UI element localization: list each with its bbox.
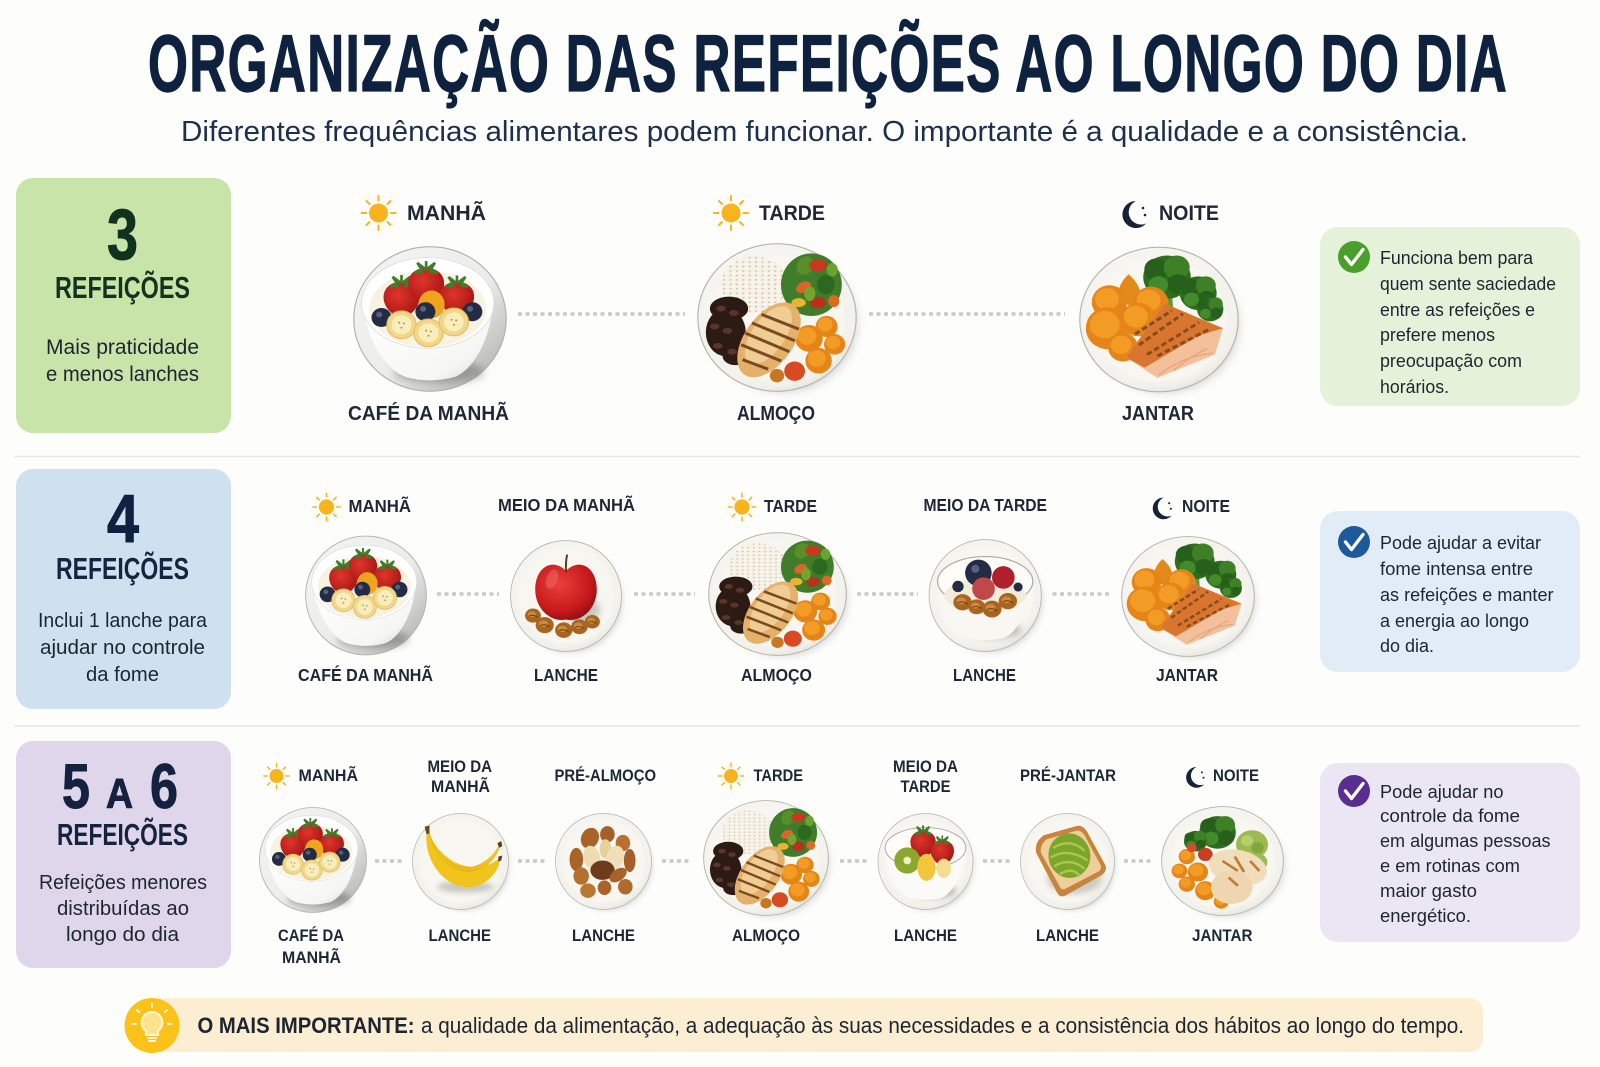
connector xyxy=(375,859,404,863)
time label: manhã: MANHÃ xyxy=(407,202,486,225)
note: blue xyxy=(1320,511,1580,672)
time label: meio da manhã: MEIO DA xyxy=(428,758,492,776)
time label: noite xyxy=(1153,496,1230,519)
panel: 5 a 6 refeições: 5 xyxy=(62,752,90,822)
food: iogurte com frutas xyxy=(878,813,974,910)
note: blue: Pode ajudar a evitar xyxy=(1380,532,1541,553)
time label: manhã: MANHÃ xyxy=(298,765,358,785)
label: café da manhã xyxy=(278,926,344,967)
time label: noite: NOITE xyxy=(1159,202,1219,225)
label: café da manhã: CAFÉ DA xyxy=(278,926,344,945)
note: purple: energético. xyxy=(1380,905,1471,926)
panel: 5 a 6 refeições: longo do dia xyxy=(66,923,180,946)
food: jantar xyxy=(1080,247,1239,392)
time label: noite: NOITE xyxy=(1182,496,1230,516)
food: maçã com castanhas xyxy=(511,541,622,652)
label: café da manhã: MANHÃ xyxy=(282,947,341,967)
time label: noite: NOITE xyxy=(1213,767,1259,785)
label: almoço: ALMOÇO xyxy=(741,665,812,685)
time label: meio da manhã: MANHÃ xyxy=(431,776,490,796)
row: 4 refeições xyxy=(16,469,1580,709)
note: green: prefere menos xyxy=(1380,324,1495,345)
food: castanhas xyxy=(555,813,652,910)
row: 5 a 6 refeições xyxy=(16,741,1580,968)
label: lanche: LANCHE xyxy=(534,665,598,685)
time label: meio da manhã: MEIO DA MANHÃ xyxy=(498,494,635,515)
panel: 3 refeições: Mais praticidade xyxy=(46,336,199,359)
time label: pré-almoço: PRÉ-ALMOÇO xyxy=(554,766,656,785)
callout: mais importante: a qualidade da alimentação, a adequação às suas necessidades e a consistência dos hábitos ao longo do tempo. xyxy=(421,1013,1464,1038)
time label: manhã: MANHÃ xyxy=(348,495,411,516)
food: jantar xyxy=(1122,537,1255,657)
connector xyxy=(634,592,695,596)
panel: 4 refeições: REFEIÇÕES xyxy=(56,550,189,586)
connector xyxy=(1052,592,1111,596)
panel: 5 a 6 refeições: A xyxy=(106,770,133,817)
label: lanche: LANCHE xyxy=(1036,927,1099,945)
label: lanche: LANCHE xyxy=(953,665,1016,685)
panel: 5 a 6 refeições: Refeições menores xyxy=(39,871,207,894)
note: blue: do dia. xyxy=(1380,635,1434,656)
time label: meio da tarde: MEIO DA xyxy=(893,758,958,776)
subtitle: Diferentes frequências alimentares podem funcionar. O importante é a qualidade e a consistência. xyxy=(181,116,1468,148)
note: purple: controle da fome xyxy=(1380,805,1520,826)
time label: noite xyxy=(1122,201,1219,228)
time label: meio da manhã xyxy=(428,758,492,796)
label: café da manhã: CAFÉ DA MANHÃ xyxy=(348,402,509,425)
note: green: Funciona bem para xyxy=(1380,247,1534,268)
time label: meio da tarde: TARDE xyxy=(900,778,950,796)
food: banana xyxy=(412,813,509,910)
panel: 4 refeições: ajudar no controle xyxy=(40,636,205,659)
panel: 3 refeições: 3 xyxy=(107,196,138,275)
panel: 5 a 6 refeições: REFEIÇÕES xyxy=(57,816,188,852)
note: green: preocupação com xyxy=(1380,350,1522,371)
time label: tarde xyxy=(714,196,825,230)
food: jantar xyxy=(1162,807,1284,916)
connector xyxy=(840,859,868,863)
connector xyxy=(869,312,1065,316)
row: 3 refeições xyxy=(16,178,1580,433)
note: purple: em algumas pessoas xyxy=(1380,830,1550,851)
connector xyxy=(437,592,499,596)
label: almoço: ALMOÇO xyxy=(737,403,815,425)
label: jantar: JANTAR xyxy=(1156,665,1218,685)
note: purple: Pode ajudar no xyxy=(1380,781,1504,802)
panel: 3 refeições xyxy=(16,178,231,433)
time label: pré-jantar: PRÉ-JANTAR xyxy=(1020,766,1116,785)
label: lanche: LANCHE xyxy=(428,927,491,945)
time label: noite xyxy=(1186,767,1259,788)
callout: mais importante: O MAIS IMPORTANTE: xyxy=(198,1013,414,1038)
panel: 3 refeições: e menos lanches xyxy=(46,363,199,386)
time label: tarde xyxy=(728,493,817,521)
time label: manhã xyxy=(362,196,486,230)
panel: 3 refeições: REFEIÇÕES xyxy=(55,269,190,305)
time label: tarde: TARDE xyxy=(759,202,825,225)
food: torrada com abacate xyxy=(1020,813,1115,910)
connector xyxy=(518,859,546,863)
connector xyxy=(518,312,685,316)
note: green xyxy=(1320,227,1580,406)
note: blue: fome intensa entre xyxy=(1380,558,1533,579)
time label: meio da tarde: MEIO DA TARDE xyxy=(924,495,1047,515)
panel: 4 refeições xyxy=(16,469,231,709)
panel: 5 a 6 refeições: 6 xyxy=(150,752,178,822)
label: almoço: ALMOÇO xyxy=(732,927,800,945)
panel: 4 refeições: da fome xyxy=(86,663,159,686)
time label: manhã xyxy=(313,493,411,521)
food: café da manhã xyxy=(260,808,366,912)
time label: manhã xyxy=(264,763,358,789)
note: green: quem sente saciedade xyxy=(1380,273,1556,294)
note: green: horários. xyxy=(1380,376,1449,397)
label: jantar: JANTAR xyxy=(1192,927,1253,945)
food: almoço xyxy=(709,533,847,656)
label: jantar: JANTAR xyxy=(1122,403,1194,425)
connector xyxy=(1124,859,1152,863)
panel: 4 refeições: Inclui 1 lanche para xyxy=(38,609,208,632)
time label: tarde: TARDE xyxy=(754,767,803,785)
note: purple: maior gasto xyxy=(1380,880,1477,901)
label: lanche: LANCHE xyxy=(572,927,635,945)
panel: 5 a 6 refeições xyxy=(16,741,231,968)
time label: tarde xyxy=(718,763,803,789)
connector xyxy=(983,859,1011,863)
time label: tarde: TARDE xyxy=(764,496,817,516)
note: blue: as refeições e manter xyxy=(1380,584,1554,605)
panel: 4 refeições: 4 xyxy=(107,481,139,557)
callout: mais importante xyxy=(124,998,1483,1053)
note: blue: a energia ao longo xyxy=(1380,610,1529,631)
connector xyxy=(857,592,918,596)
food: almoço xyxy=(704,801,829,916)
note: green: entre as refeições e xyxy=(1380,299,1535,320)
panel: 5 a 6 refeições: distribuídas ao xyxy=(57,897,189,920)
food: iogurte xyxy=(929,540,1042,652)
food: almoço xyxy=(698,244,857,392)
label: café da manhã: CAFÉ DA MANHÃ xyxy=(298,664,433,685)
icon: light bulb xyxy=(124,998,180,1053)
note: purple: e em rotinas com xyxy=(1380,855,1520,876)
time label: meio da tarde xyxy=(893,758,958,796)
note: purple xyxy=(1320,763,1580,942)
connector xyxy=(662,859,690,863)
food: café da manhã xyxy=(306,536,426,655)
label: lanche: LANCHE xyxy=(894,927,957,945)
food: café da manhã xyxy=(354,247,506,391)
